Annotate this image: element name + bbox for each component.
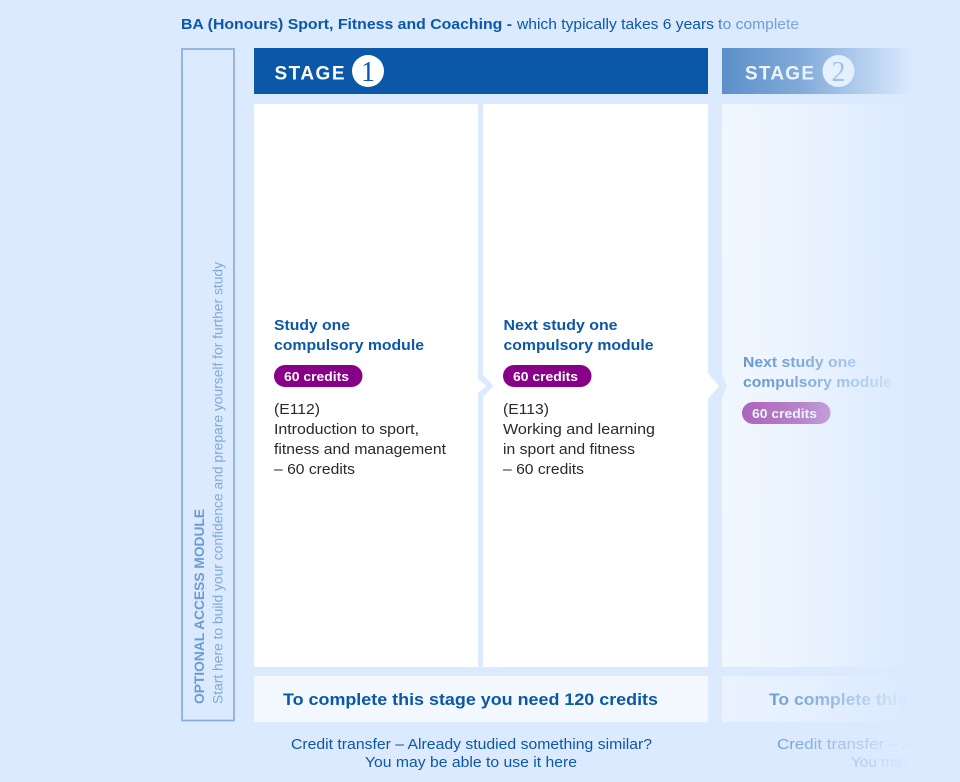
stage 1 credit transfer note: You may be able to use it here — [365, 755, 577, 771]
column: first module: – 60 credits — [274, 462, 355, 478]
stage 2 credit transfer note: You may — [851, 755, 911, 771]
column: first module: compulsory module — [274, 338, 424, 354]
panel: optional access module — [182, 49, 234, 720]
stage 1 header: STAGE — [274, 64, 344, 84]
access module description: Start here to build your confidence and prepare yourself for further study — [210, 262, 226, 704]
stage 1 header: 1 — [361, 57, 375, 88]
stage 1 header — [254, 48, 708, 94]
stage 2 credit transfer note: Credit transfer – Al — [777, 737, 917, 753]
stage 2 credit transfer note — [777, 737, 917, 771]
stage 1 credits requirement: To complete this stage you need 120 credits — [283, 691, 658, 709]
credits pill — [742, 402, 830, 424]
stage 2 header — [722, 48, 922, 94]
column: first module — [254, 104, 478, 667]
arrow: first to second module — [478, 375, 494, 397]
column: second module: in sport and fitness — [503, 442, 635, 458]
column: third module — [722, 104, 922, 667]
title: BA (Honours) Sport, Fitness and Coaching - — [181, 17, 512, 33]
column: second module: – 60 credits — [503, 462, 584, 478]
column: first module: Introduction to sport, — [274, 422, 419, 438]
credits pill: 60 credits — [752, 407, 817, 421]
stage 1 credits requirement — [254, 676, 708, 722]
arrow: second module to stage 2 — [708, 373, 727, 399]
stage 2 header: STAGE — [745, 64, 814, 84]
column: first module: (E112) — [274, 402, 320, 418]
stage 1 credit transfer note — [291, 737, 652, 771]
credits pill — [274, 365, 362, 387]
stage 2 header: 2 — [832, 57, 846, 88]
column: second module: compulsory module — [504, 338, 654, 354]
column: third module: compulsory module — [743, 375, 892, 391]
stage 2 credits requirement: To complete this — [769, 691, 907, 709]
column: second module: Working and learning — [503, 422, 655, 438]
column: second module: Next study one — [504, 318, 618, 334]
credits pill — [503, 365, 592, 387]
credits pill: 60 credits — [513, 370, 578, 384]
stage 2 credits requirement — [722, 676, 922, 722]
column: first module: fitness and management — [274, 442, 446, 458]
credits pill: 60 credits — [284, 370, 349, 384]
column: first module: Study one — [274, 318, 350, 334]
title: which typically takes 6 years to complete — [516, 17, 799, 33]
stage 1 credit transfer note: Credit transfer – Already studied something similar? — [291, 737, 652, 753]
panel: stage 2 — [722, 48, 922, 771]
title — [181, 17, 799, 33]
column: second module — [483, 104, 708, 667]
column: second module: (E113) — [503, 402, 549, 418]
panel: stage 1 — [254, 48, 708, 771]
access module heading: OPTIONAL ACCESS MODULE — [192, 509, 207, 704]
column: third module: Next study one — [743, 355, 856, 371]
